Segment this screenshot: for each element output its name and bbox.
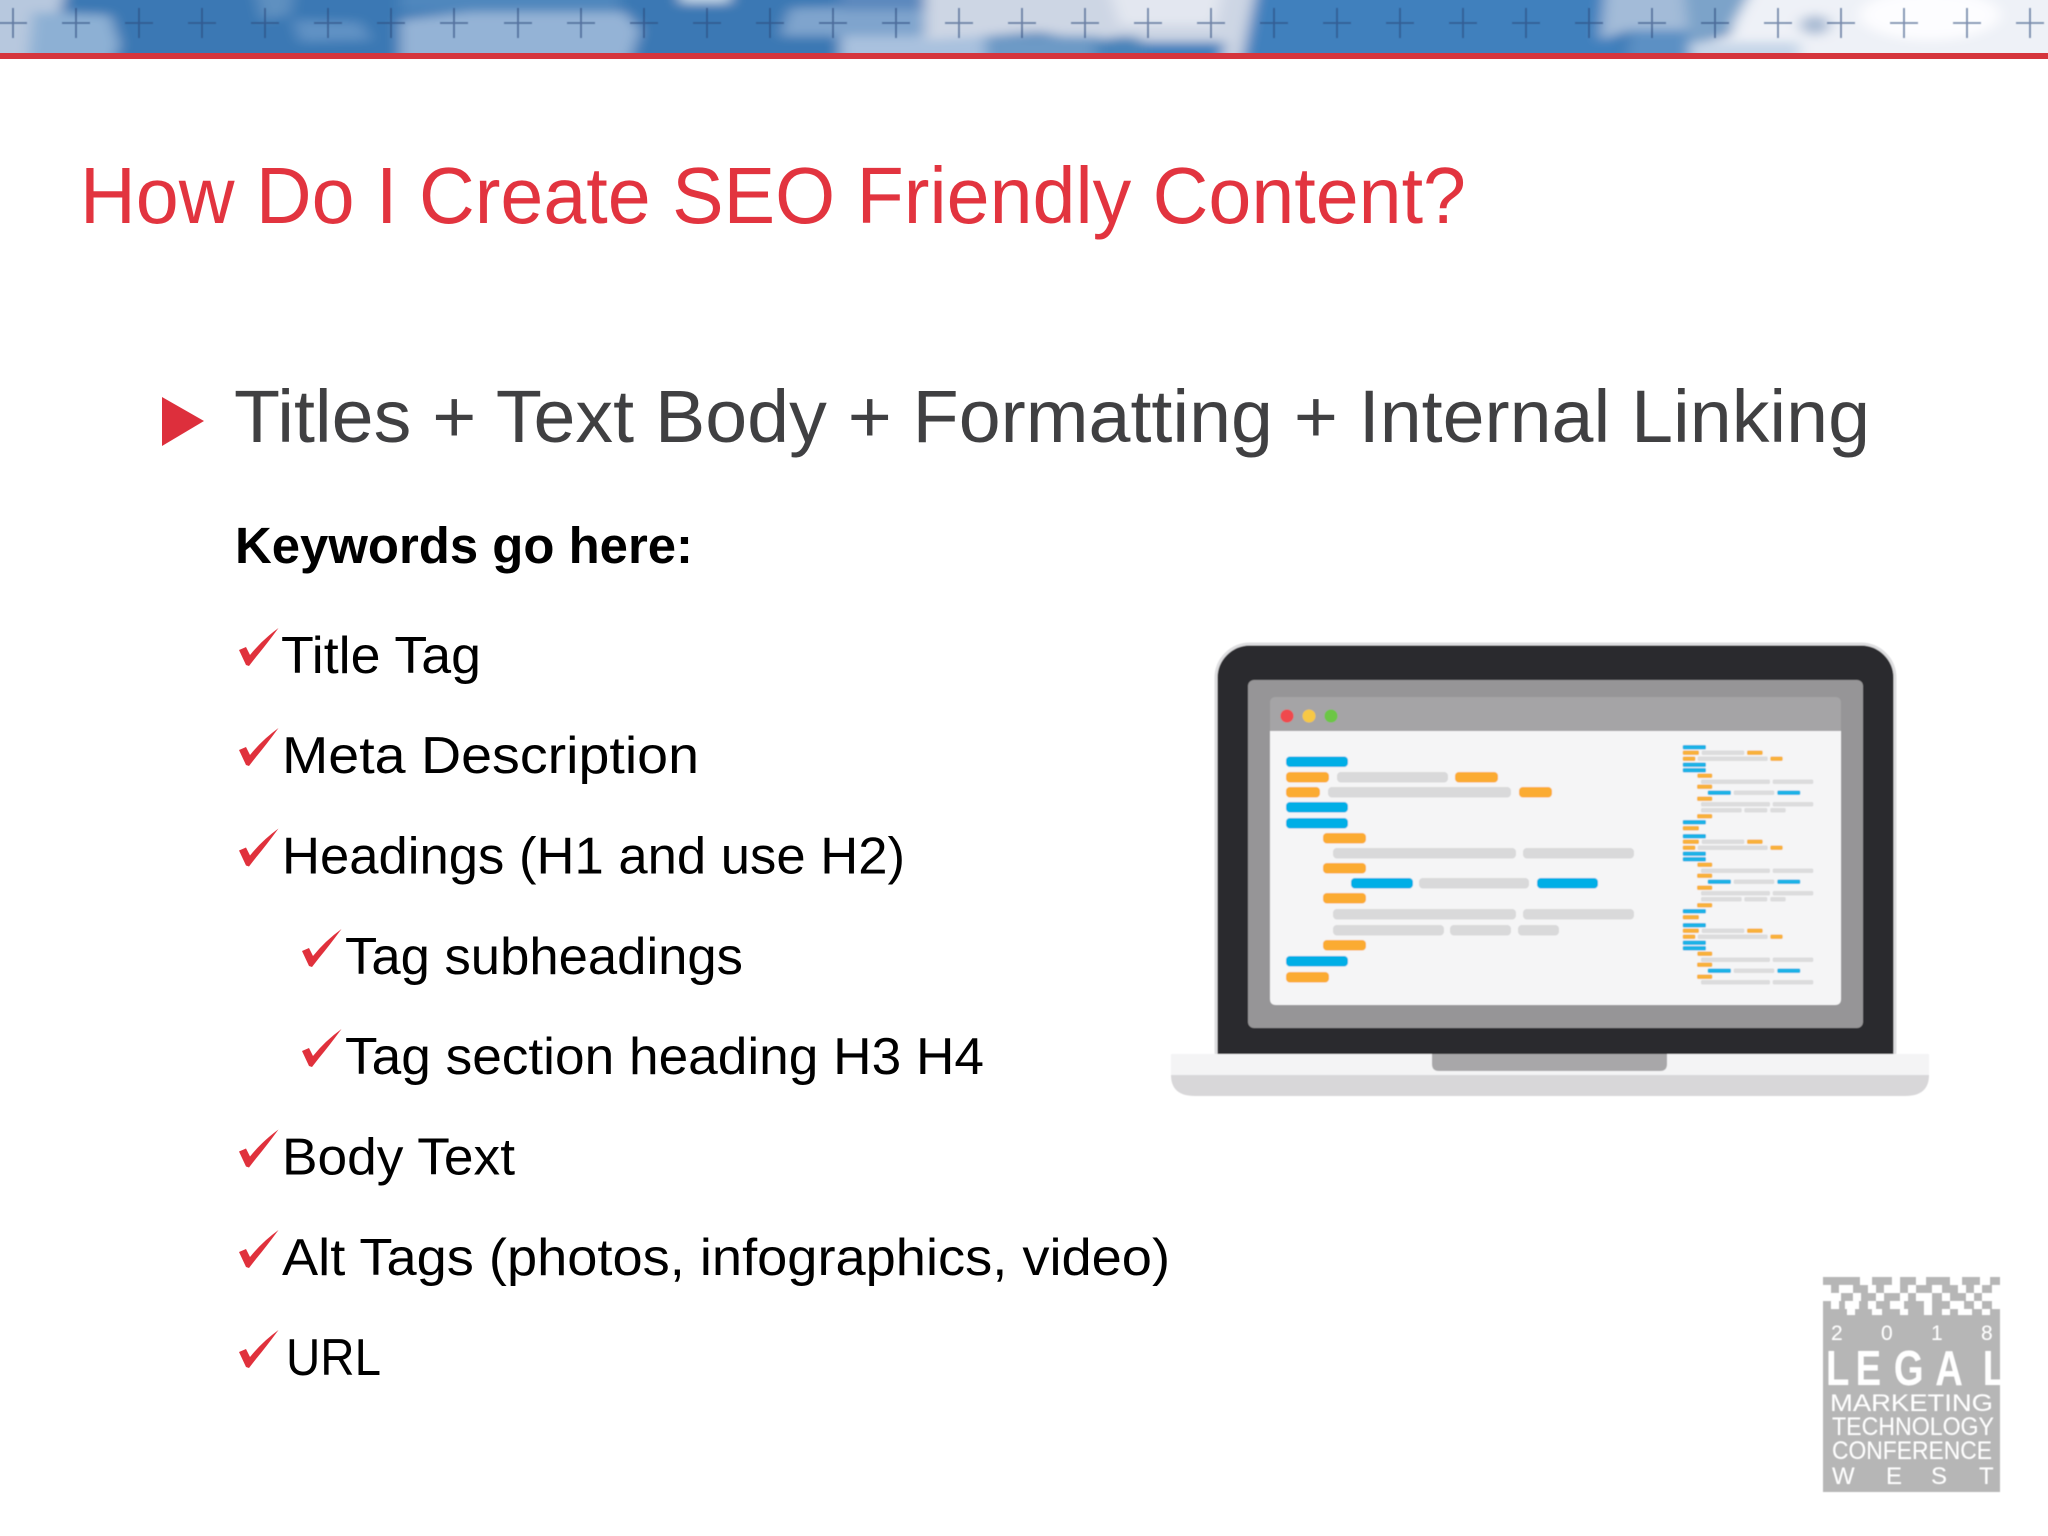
logo: 2018 Legal Marketing Technology Conference West	[1823, 1277, 2006, 1492]
subtitle: Titles + Text Body + Formatting + Internal Linking	[234, 375, 1870, 458]
item: Tag section heading: Tag section heading H3 H4	[345, 1028, 984, 1086]
logo lines: MARKETING	[1830, 1390, 1993, 1417]
header banner: sky and crosses	[0, 0, 2048, 53]
keywords heading: Keywords go here:	[235, 517, 693, 574]
logo LEGAL: LEGAL	[1826, 1342, 2006, 1396]
item: Body Text: Body Text	[282, 1128, 516, 1186]
logo lines: CONFERENCE	[1832, 1437, 1992, 1465]
laptop illustration	[1171, 644, 1929, 1096]
laptop notch	[1432, 1054, 1667, 1071]
item: Title Tag: Title Tag	[281, 627, 481, 685]
window	[1270, 697, 1841, 731]
logo lines	[1830, 1390, 1994, 1490]
window buttons	[1280, 710, 1338, 722]
logo pixel pattern	[1823, 1277, 2000, 1315]
logo lines: WEST	[1832, 1463, 1994, 1490]
item: Alt Tags: Alt Tags (photos, infographics, video)	[282, 1229, 1170, 1287]
screen	[1248, 680, 1863, 1028]
logo lines: TECHNOLOGY	[1832, 1413, 1994, 1441]
checklist	[239, 627, 1170, 1387]
laptop bezel	[1216, 644, 1895, 1084]
item: Headings: Headings (H1 and use H2)	[282, 828, 905, 886]
title: How Do I Create SEO Friendly Content?	[80, 151, 1466, 240]
logo year: 2018	[1831, 1322, 1993, 1345]
code minimap	[1683, 745, 1813, 984]
header red rule	[0, 53, 2048, 59]
item: URL	[239, 1329, 381, 1387]
laptop base	[1171, 1054, 1929, 1096]
code bars	[1286, 756, 1634, 982]
item: URL: URL	[286, 1329, 381, 1387]
icon: red triangle bullet	[162, 397, 204, 446]
item: Meta Description: Meta Description	[282, 727, 699, 785]
item: Tag subheadings: Tag subheadings	[345, 928, 743, 986]
